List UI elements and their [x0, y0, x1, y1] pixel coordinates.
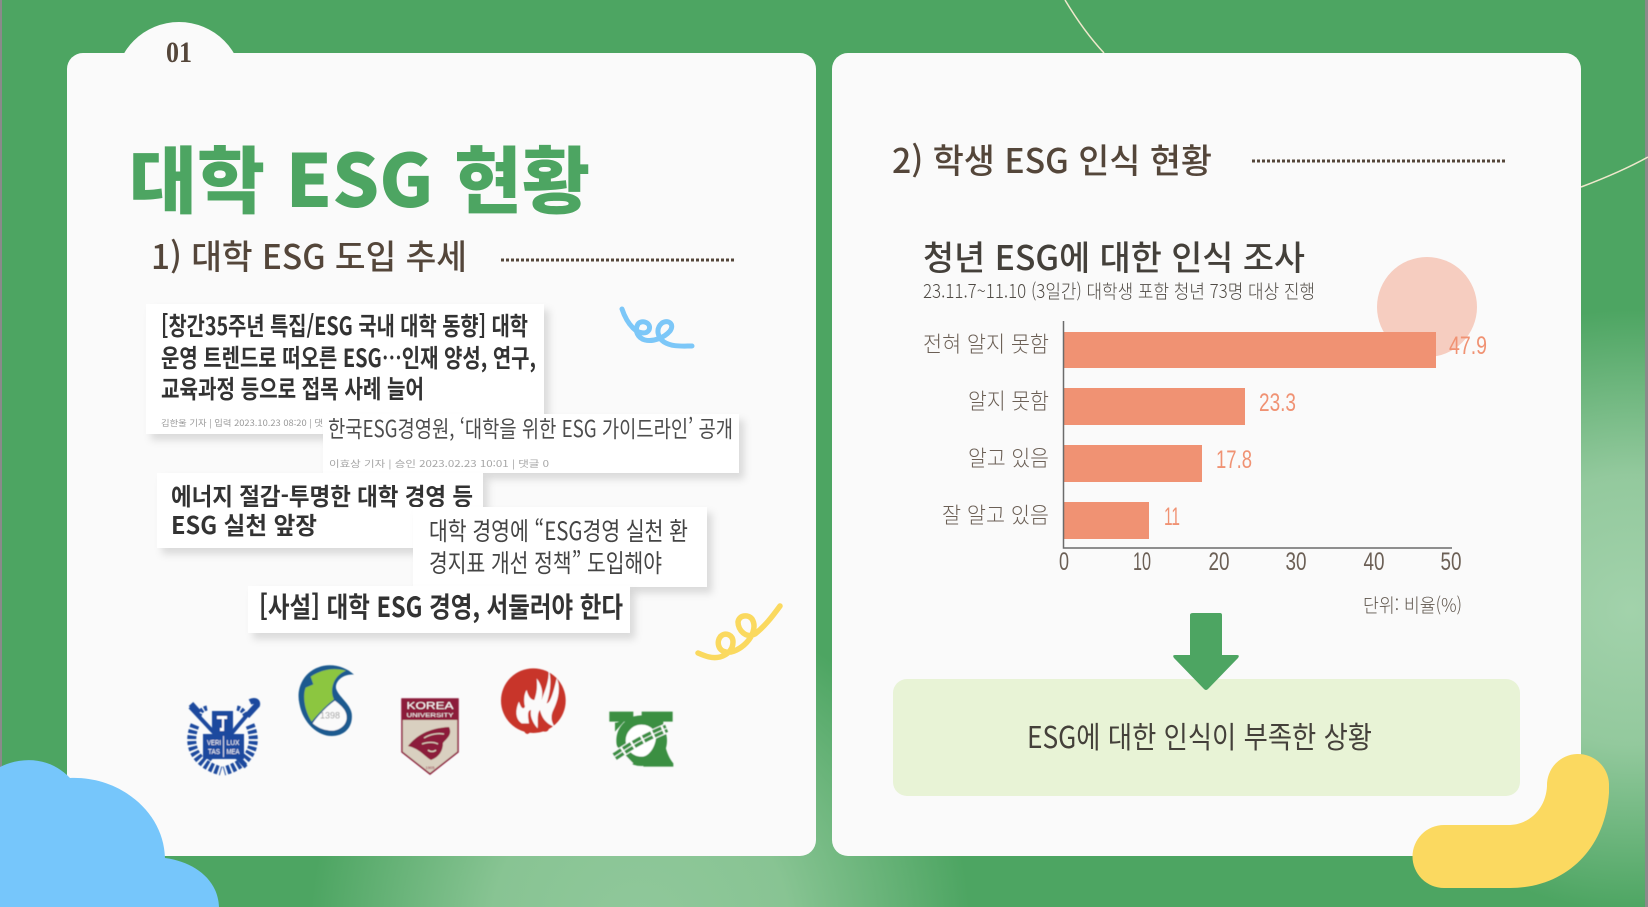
category labels: 알지 못함	[968, 384, 1049, 416]
logo: Korea University: KOREA	[406, 701, 454, 712]
logo: Korea University: 1905	[426, 765, 435, 770]
value labels: 23.3	[1259, 389, 1296, 417]
clipping 1	[146, 304, 544, 434]
logo: flame circle	[501, 668, 566, 734]
logo: Seoul National University	[190, 701, 257, 771]
value labels: 11	[1164, 503, 1180, 531]
chart subtitle: 23.11.7~11.10 (3일간) 대학생 포함 청년 73명 대상 진행	[923, 277, 1315, 304]
title: 대학 ESG 현황	[129, 123, 590, 229]
value labels: 17.8	[1216, 446, 1252, 474]
category labels	[923, 327, 1049, 530]
logo: ginkgo leaf 1398: 1398	[320, 711, 340, 721]
clipping 1: 교육과정 등으로 접목 사례 늘어	[161, 370, 424, 406]
logo: Korea University: UNIVERSITY	[406, 713, 455, 719]
logo: ginkgo leaf 1398	[299, 665, 354, 736]
clipping 4	[413, 507, 707, 587]
axis ticks: 20	[1208, 548, 1230, 576]
university logos	[190, 665, 673, 774]
value labels	[1164, 332, 1487, 531]
arrow	[1173, 613, 1239, 690]
panel: right card	[832, 53, 1581, 856]
bars	[1064, 332, 1436, 539]
clipping 5: [사설] 대학 ESG 경영, 서둘러야 한다	[259, 586, 623, 626]
clipping 1: [창간35주년 특집/ESG 국내 대학 동향] 대학	[161, 307, 528, 343]
subheading: student awareness: 2) 학생 ESG 인식 현황	[892, 134, 1212, 183]
icon: blue squiggle	[622, 309, 692, 346]
axis ticks: 0	[1059, 548, 1069, 576]
clipping 1: 김한울 기자 | 입력 2023.10.23 08:20 | 댓	[161, 417, 323, 429]
clipping 2: 한국ESG경영원, ‘대학을 위한 ESG 가이드라인’ 공개	[328, 410, 733, 444]
subheading: adoption trend: 1) 대학 ESG 도입 추세	[151, 230, 467, 279]
logo: Seoul National University: TAS	[208, 749, 220, 756]
axis ticks	[1059, 548, 1462, 576]
clipping 1: 운영 트렌드로 떠오른 ESG…인재 양성, 연구,	[161, 339, 536, 375]
clipping 3: ESG 실천 앞장	[171, 506, 317, 541]
clipping 4: 대학 경영에 “ESG경영 실천 환	[429, 512, 688, 548]
decorative circle	[1377, 257, 1477, 357]
axis ticks: 10	[1133, 548, 1151, 576]
logo: green leaf emblem	[608, 712, 673, 767]
category labels: 알고 있음	[968, 441, 1049, 473]
icon: blue cloud	[0, 760, 219, 907]
value labels: 47.9	[1449, 332, 1487, 360]
chart title: 청년 ESG에 대한 인식 조사	[923, 231, 1305, 280]
clipping 2	[323, 410, 739, 473]
icon: yellow squiggle	[698, 606, 780, 658]
category labels: 잘 알고 있음	[942, 498, 1049, 530]
axis ticks: 30	[1286, 548, 1306, 576]
logo: Seoul National University: MEA	[226, 749, 240, 756]
logo: Seoul National University: LUX	[226, 740, 240, 747]
clipping 3	[157, 473, 483, 548]
axis ticks: 40	[1364, 548, 1384, 576]
tab number: 01	[166, 36, 192, 69]
category labels: 전혀 알지 못함	[923, 327, 1049, 359]
callout	[893, 679, 1520, 796]
news clippings	[146, 304, 739, 633]
icon: yellow blob	[1413, 754, 1609, 888]
panel: left card	[67, 22, 816, 856]
callout: ESG에 대한 인식이 부족한 상황	[1027, 713, 1372, 757]
logo: Seoul National University: VERI	[207, 740, 221, 747]
clipping 3: 에너지 절감-투명한 대학 경영 등	[171, 477, 473, 512]
logo: Korea University	[402, 699, 458, 774]
axes	[1064, 321, 1452, 548]
unit note: 단위: 비율(%)	[1363, 591, 1462, 618]
bar chart	[923, 231, 1487, 618]
clipping 4: 경지표 개선 정책” 도입해야	[429, 544, 662, 580]
axis ticks: 50	[1440, 548, 1462, 576]
clipping 2: 이효상 기자 | 승인 2023.02.23 10:01 | 댓글 0	[329, 457, 549, 470]
